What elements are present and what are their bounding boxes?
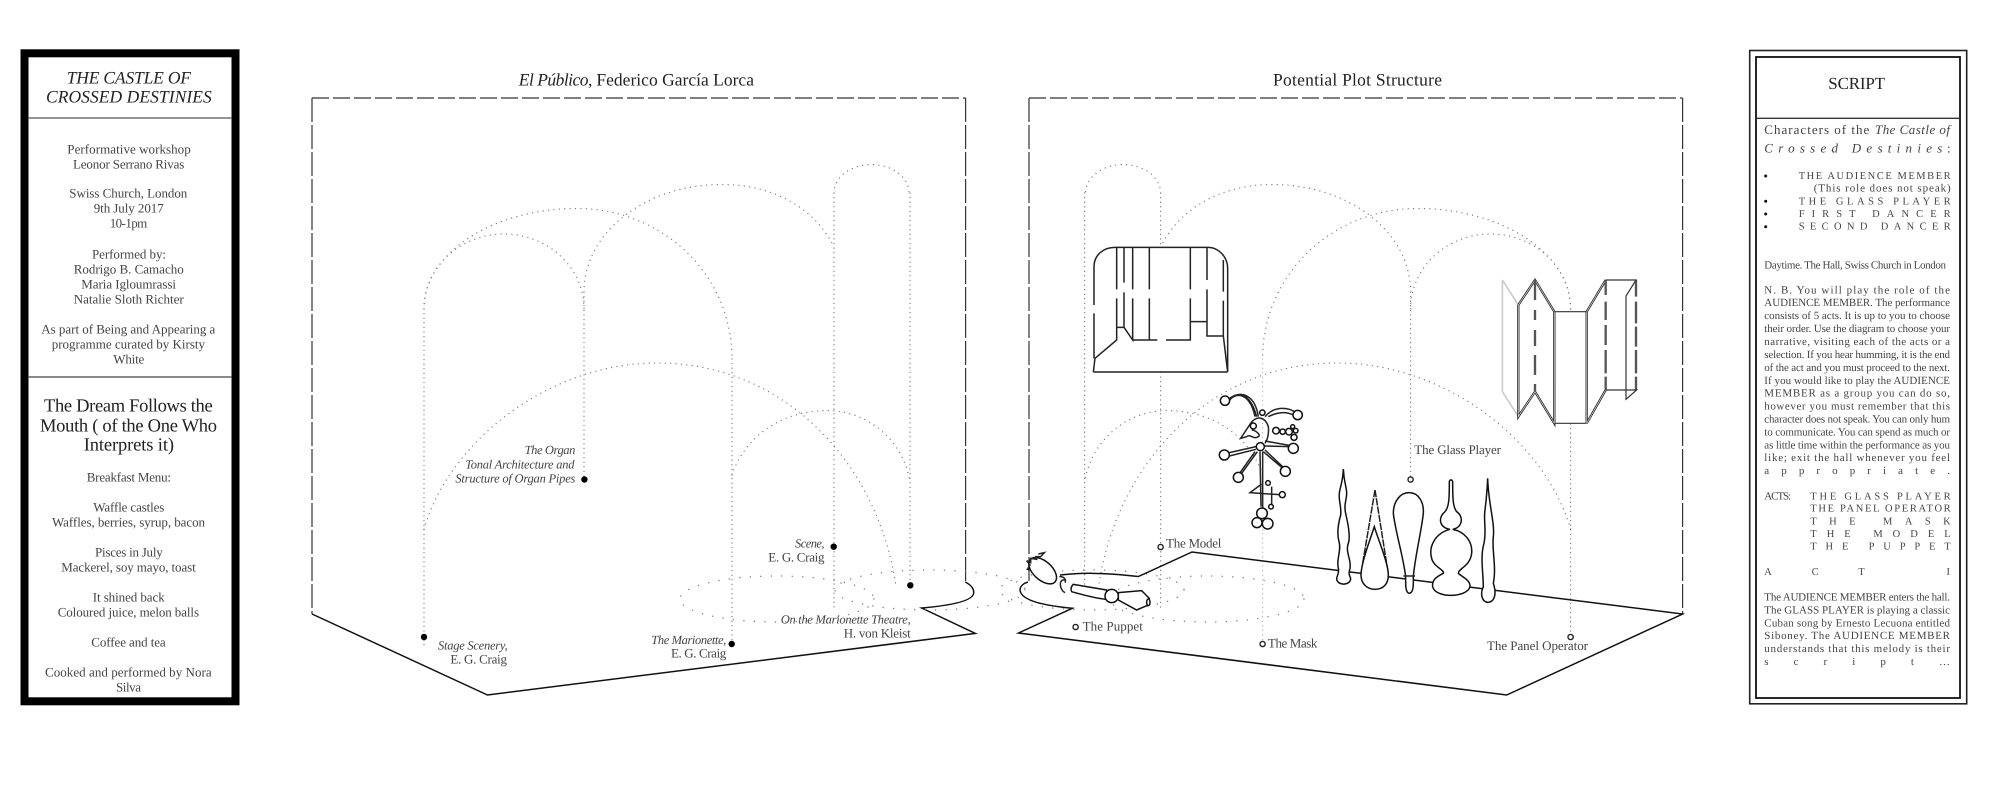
glass 3	[1393, 493, 1423, 593]
label: Stage Scenery	[438, 639, 508, 667]
text block: act one: Siboney. The AUDIENCE MEMBER	[1764, 630, 1951, 642]
text block: instructions: If you would like to play the AUDIENCE	[1764, 375, 1950, 387]
heading: workshop title: THE CASTLE OF	[67, 67, 191, 87]
label: The Model: The Model	[1166, 536, 1222, 551]
text block: act one: ACT I	[1764, 567, 1950, 578]
text block: instructions: like; exit the hall whenever you feel	[1764, 452, 1950, 464]
list: cast: THE AUDIENCE MEMBER	[1799, 171, 1951, 182]
text block: instructions: MEMBER as a group you can do so,	[1764, 388, 1950, 400]
panel: programme	[24, 53, 236, 701]
text block: instructions: as little time within the performance as you	[1764, 439, 1950, 451]
text block: workshop details: Swiss Church, London	[69, 186, 188, 201]
text block: characters	[1764, 122, 1952, 155]
label: The Marionette: E. G. Craig	[671, 646, 727, 660]
heading: Potential Plot Structure: Potential Plot Structure	[1273, 70, 1442, 90]
text block: act one: The AUDIENCE MEMBER enters the hall.	[1764, 591, 1950, 603]
label: Scene	[768, 537, 825, 565]
text block: instructions: appropriate.	[1764, 465, 1950, 477]
heading: El Publico: El Público,	[518, 70, 592, 90]
text block: act one: script…	[1764, 656, 1950, 668]
stage floor outline	[312, 582, 975, 695]
text block: characters: Characters of the	[1764, 122, 1870, 137]
text block: workshop details: 9th July 2017	[94, 201, 164, 216]
label: Scene: Scene,	[795, 537, 824, 551]
stage floor outline	[1018, 552, 1683, 695]
list: cast: (This role does not speak)	[1814, 183, 1951, 195]
heading: workshop title: CROSSED DESTINIES	[46, 87, 212, 107]
text block: instructions	[1764, 284, 1950, 477]
text block: workshop details: As part of Being and Appearing a	[41, 321, 216, 336]
icon: the model box	[1093, 247, 1228, 372]
heading: breakfast title: Interprets it)	[84, 436, 174, 456]
text block: act one: Cuban song by Ernesto Lecuona entitled	[1764, 617, 1950, 629]
text block: workshop details: Maria Igloumrassi	[81, 276, 176, 291]
text block: instructions: their order. Use the diagram to choose your	[1764, 323, 1950, 335]
label: The Puppet: The Puppet	[1083, 618, 1143, 634]
text block: instructions: consists of 5 acts. It is up to you to choose	[1764, 310, 1950, 322]
text block: instructions: narrative, visiting each of the acts or a	[1764, 336, 1950, 348]
list: cast: THE GLASS PLAYER	[1799, 196, 1951, 207]
label: Stage Scenery: E. G. Craig	[450, 652, 508, 667]
label: On the Marionette Theatre: On the Marionette Theatre,	[781, 612, 911, 626]
text block: instructions: character does not speak. You can only hum	[1764, 414, 1950, 426]
heading: El Publico	[518, 70, 754, 90]
stage wall outline	[312, 98, 966, 614]
text block: workshop details: 10-1pm	[110, 216, 147, 231]
icon: the mask	[1219, 395, 1302, 529]
text block: breakfast menu: Mackerel, soy mayo, toast	[61, 560, 196, 575]
label: The Organ: Structure of Organ Pipes	[455, 471, 576, 485]
diagram: right stage	[1000, 98, 1683, 695]
text block: breakfast menu: Cooked and performed by Nora	[45, 665, 212, 680]
label: The Panel Operator: The Panel Operator	[1487, 638, 1589, 653]
heading: breakfast title: The Dream Follows the	[44, 397, 213, 417]
label: The Organ: The Organ	[525, 443, 575, 457]
text block: breakfast menu: Pisces in July	[95, 545, 163, 560]
text block: act one	[1764, 567, 1951, 668]
label: Scene: E. G. Craig	[768, 550, 825, 565]
text block: instructions: however you must remember that this	[1764, 401, 1950, 413]
text block: instructions: to communicate. You can spend as much or	[1764, 426, 1950, 438]
label: On the Marionette Theatre	[781, 612, 911, 640]
label: The Marionette	[651, 633, 727, 660]
icon: glass instruments	[1337, 469, 1495, 602]
glass 1	[1337, 469, 1351, 584]
text block: breakfast menu: It shined back	[93, 590, 165, 605]
label: The Mask: The Mask	[1268, 636, 1318, 651]
text block: workshop details: White	[113, 351, 145, 366]
text block: instructions: AUDIENCE MEMBER. The performance	[1764, 297, 1950, 309]
stage wall outline	[1029, 98, 1683, 614]
glass 5	[1482, 478, 1495, 602]
label: The Marionette: The Marionette,	[651, 633, 726, 647]
act markers	[1073, 477, 1573, 647]
text block: workshop details	[41, 141, 216, 366]
text block: breakfast menu: Waffles, berries, syrup, bacon	[52, 515, 206, 530]
text block: setting: Daytime. The Hall, Swiss Church in London	[1764, 259, 1946, 271]
heading: breakfast title: Mouth ( of the One Who	[40, 416, 217, 436]
label: The Glass Player: The Glass Player	[1414, 442, 1502, 457]
label: The Organ: Tonal Architecture and	[465, 457, 575, 471]
text block: breakfast menu: Coffee and tea	[91, 635, 166, 650]
heading: script: SCRIPT	[1828, 74, 1886, 93]
text block: acts: THE MASK	[1810, 516, 1951, 527]
reference points	[421, 476, 914, 647]
list: cast: FIRST DANCER	[1799, 209, 1951, 220]
dotted arches	[1085, 165, 1571, 644]
text block: act one: understands that this melody is their	[1764, 643, 1950, 655]
dotted arches	[424, 165, 1025, 649]
dotted floor ellipses	[1000, 570, 1304, 622]
text block: acts: THE PANEL OPERATOR	[1810, 504, 1951, 515]
text block: breakfast menu: Coloured juice, melon balls	[58, 605, 199, 620]
text block: breakfast menu: Waffle castles	[93, 500, 164, 515]
glass 2	[1361, 490, 1388, 589]
glass 4	[1431, 480, 1472, 595]
text block: breakfast menu: Breakfast Menu:	[87, 470, 171, 485]
text block: characters: The Castle of	[1875, 122, 1952, 137]
text block: acts	[1764, 490, 1951, 553]
text block: instructions: selection. If you hear humming, it is the end	[1764, 349, 1950, 361]
text block: breakfast menu: Silva	[116, 680, 141, 695]
label: On the Marionette Theatre: H. von Kleist	[844, 625, 911, 640]
heading: workshop title	[46, 67, 212, 107]
heading: breakfast title	[40, 397, 217, 456]
icon: the puppet	[1024, 553, 1150, 610]
list: cast	[1764, 171, 1951, 233]
text block: acts: ACTS:	[1764, 490, 1791, 502]
text block: act one: The GLASS PLAYER is playing a classic	[1764, 604, 1950, 616]
text block: workshop details: Performed by:	[92, 246, 166, 261]
label: The Organ	[455, 443, 576, 485]
text block: characters: :	[1947, 140, 1951, 155]
text block: workshop details: Natalie Sloth Richter	[74, 291, 184, 306]
text block: workshop details: Rodrigo B. Camacho	[74, 261, 184, 276]
list: cast: SECOND DANCER	[1799, 222, 1951, 233]
heading: El Publico: Federico García Lorca	[596, 70, 754, 90]
text block: instructions: of the act and you must proceed to the next.	[1764, 362, 1950, 374]
text block: instructions: N. B. You will play the role of the	[1764, 284, 1950, 296]
panel: script	[1750, 50, 1967, 704]
text block: workshop details: Leonor Serrano Rivas	[73, 156, 184, 171]
icon: the panel screen	[1502, 280, 1637, 423]
text block: characters: Crossed Destinies	[1764, 140, 1942, 155]
text block: breakfast menu	[45, 470, 212, 695]
label: Stage Scenery: Stage Scenery,	[438, 639, 508, 653]
text block: acts: THE GLASS PLAYER	[1810, 491, 1951, 502]
diagram: left stage	[312, 98, 1025, 695]
text block: workshop details: Performative workshop	[67, 141, 191, 156]
text block: workshop details: programme curated by Kirsty	[52, 336, 206, 351]
text block: acts: THE MODEL	[1810, 529, 1951, 540]
text block: acts: THE PUPPET	[1810, 542, 1951, 553]
